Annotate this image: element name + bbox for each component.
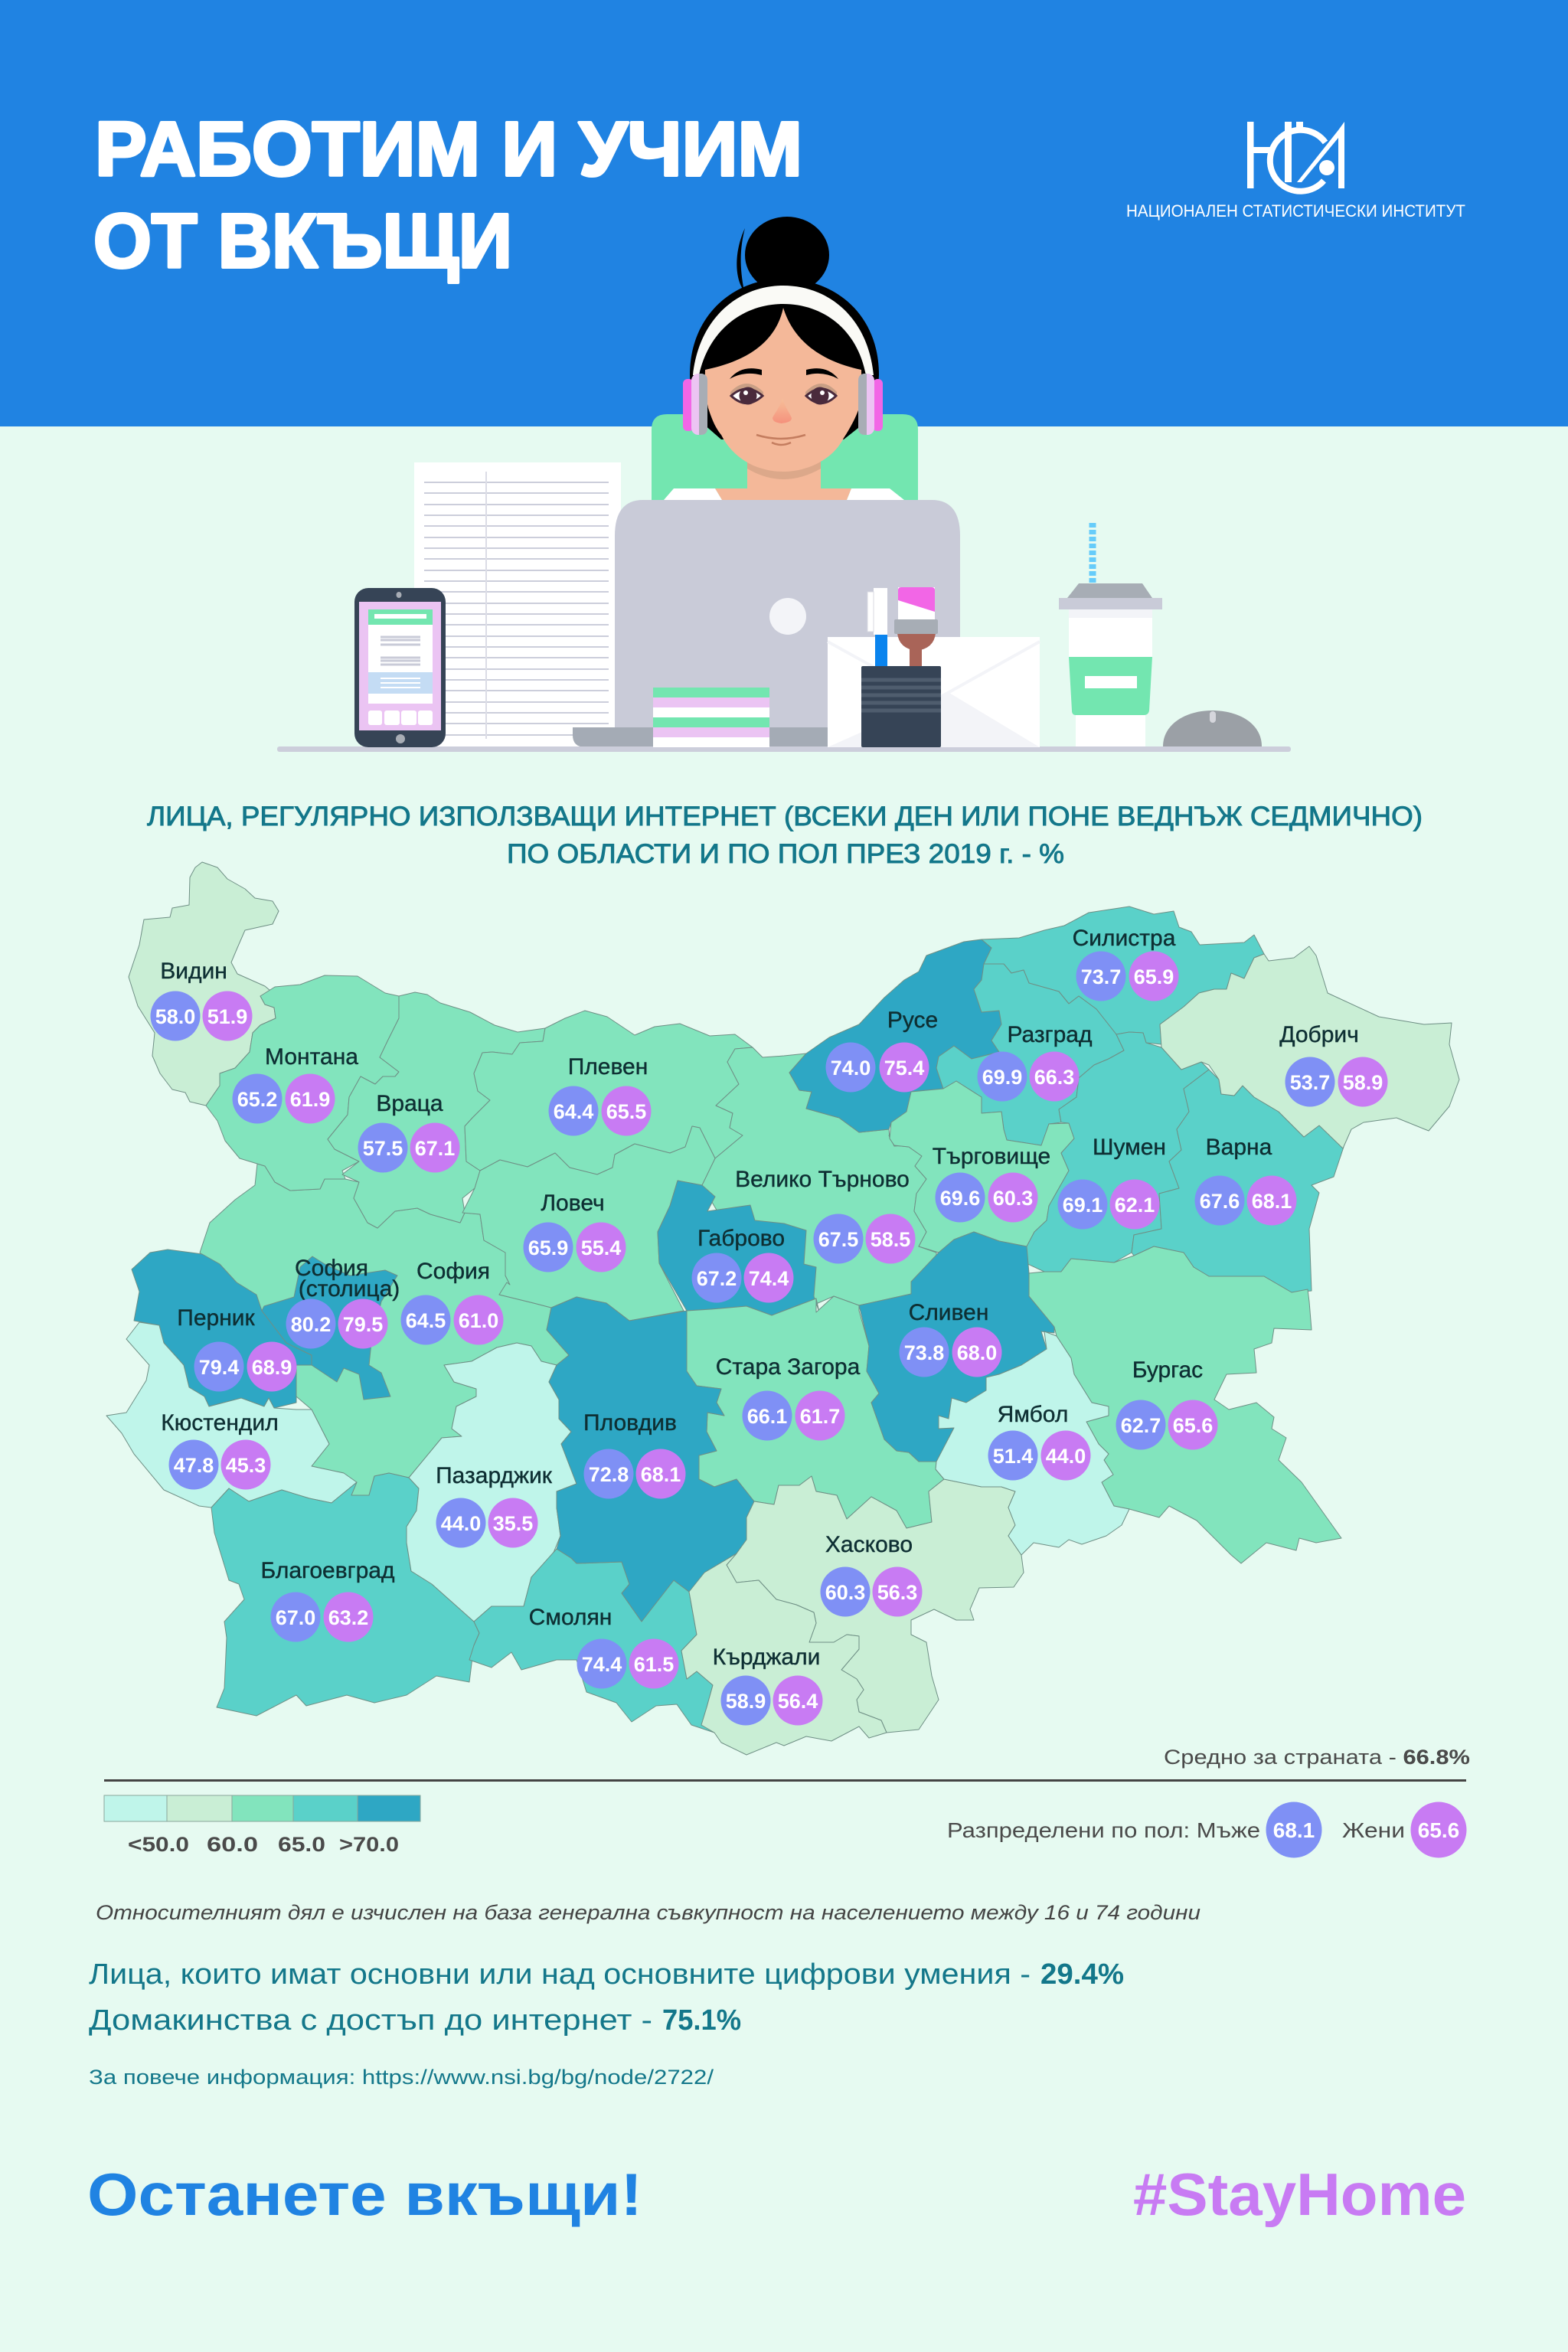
data: Силистра: 65.9 bbox=[1134, 965, 1174, 988]
data: София bbox=[401, 1259, 504, 1344]
header band bbox=[0, 0, 1568, 426]
data: Хасково bbox=[821, 1532, 922, 1617]
data: Смолян: Смолян bbox=[529, 1605, 612, 1630]
data: Габрово: 67.2 bbox=[697, 1267, 737, 1290]
data: Ловеч bbox=[524, 1191, 626, 1272]
data: Пловдив: 68.1 bbox=[641, 1463, 681, 1486]
Danube-side lake bbox=[889, 1134, 906, 1146]
map heading: ПО ОБЛАСТИ И ПО ПОЛ ПРЕЗ 2019 г. - % bbox=[507, 839, 1064, 869]
data: Кюстендил: Кюстендил bbox=[161, 1410, 279, 1436]
district: Vratsa bbox=[328, 992, 545, 1228]
internet access statistic: Домакинства с достъп до интернет - bbox=[89, 2004, 652, 2037]
data: Ямбол bbox=[988, 1402, 1090, 1481]
data: Монтана: Монтана bbox=[265, 1044, 358, 1070]
district: Haskovo bbox=[727, 1476, 1024, 1733]
district: Silistra bbox=[982, 906, 1264, 1044]
data: Ловеч: Ловеч bbox=[541, 1191, 605, 1216]
data: Шумен: 69.1 bbox=[1063, 1194, 1102, 1217]
district: Dobrich bbox=[1160, 946, 1459, 1148]
data: Пазарджик bbox=[436, 1463, 553, 1548]
data: Стара Загора: 66.1 bbox=[747, 1405, 787, 1428]
data: Враца: 57.5 bbox=[363, 1137, 403, 1160]
data: Плевен bbox=[548, 1054, 651, 1136]
data: София (столица) bbox=[286, 1256, 400, 1349]
slogan: Останете вкъщи! bbox=[87, 2161, 642, 2228]
data: Шумен bbox=[1058, 1135, 1166, 1230]
district: Burgas bbox=[1029, 1246, 1341, 1563]
data: Пловдив bbox=[583, 1410, 686, 1499]
data: Добрич bbox=[1279, 1022, 1387, 1107]
district: Plovdiv bbox=[547, 1297, 754, 1622]
district: Vidin bbox=[129, 862, 279, 1106]
data: Благоевград: 63.2 bbox=[328, 1606, 368, 1629]
data: Велико Търново: 58.5 bbox=[871, 1228, 910, 1251]
mouse bbox=[1163, 710, 1262, 746]
data: Видин bbox=[150, 959, 253, 1041]
data: Монтана: 61.9 bbox=[290, 1088, 330, 1111]
data: Враца: Враца bbox=[376, 1091, 443, 1116]
data: София: София bbox=[416, 1259, 490, 1284]
colour legend: <50.0 bbox=[128, 1833, 189, 1856]
face bbox=[705, 308, 861, 472]
data: Стара Загора: Стара Загора bbox=[716, 1354, 861, 1380]
data: Враца bbox=[358, 1091, 459, 1173]
district: Sofia region bbox=[200, 1164, 569, 1495]
data: Силистра bbox=[1073, 926, 1179, 1001]
district: Smolyan bbox=[469, 1549, 714, 1733]
data: Русе: 74.0 bbox=[831, 1057, 871, 1080]
data: София (столица): 80.2 bbox=[291, 1313, 331, 1336]
eyes bbox=[730, 368, 838, 404]
bun bbox=[737, 217, 829, 293]
internet access statistic: 75.1% bbox=[662, 2004, 741, 2037]
district: Gabrovo bbox=[658, 1181, 819, 1315]
data: Разград bbox=[977, 1022, 1092, 1101]
data: Бургас bbox=[1116, 1357, 1217, 1450]
data: Ямбол: Ямбол bbox=[998, 1402, 1068, 1427]
paper sheet bbox=[414, 462, 621, 747]
data: Разград: Разград bbox=[1008, 1022, 1092, 1047]
data: Кюстендил: 45.3 bbox=[226, 1454, 266, 1477]
data: Силистра: 73.7 bbox=[1081, 965, 1121, 988]
hashtag: #StayHome bbox=[1133, 2161, 1466, 2228]
map heading: ЛИЦА, РЕГУЛЯРНО ИЗПОЛЗВАЩИ ИНТЕРНЕТ (ВСЕКИ ДЕН ИЛИ ПОНЕ ВЕДНЪЖ СЕДМИЧНО) bbox=[147, 802, 1423, 831]
data: Плевен: Плевен bbox=[568, 1054, 648, 1080]
data: Търговище: 60.3 bbox=[993, 1187, 1033, 1210]
data: Шумен: 62.1 bbox=[1115, 1194, 1155, 1217]
gender distribution: 68.1 bbox=[1273, 1818, 1315, 1842]
envelope bbox=[828, 637, 1040, 747]
data: Смолян: 74.4 bbox=[582, 1653, 622, 1676]
notes stack bbox=[653, 688, 769, 747]
data: София: 64.5 bbox=[406, 1309, 446, 1332]
data: Бургас: Бургас bbox=[1132, 1357, 1203, 1383]
data: Благоевград: Благоевград bbox=[261, 1558, 394, 1583]
data: София: 61.0 bbox=[459, 1309, 498, 1332]
data: София (столица): (столица) bbox=[299, 1276, 400, 1302]
data: Пловдив: 72.8 bbox=[589, 1463, 629, 1486]
district: Ruse bbox=[789, 939, 1001, 1132]
district: Pleven bbox=[465, 1011, 753, 1174]
district: Sliven bbox=[859, 1232, 1054, 1462]
district: Sofia city bbox=[262, 1256, 397, 1400]
data: Кюстендил: 47.8 bbox=[174, 1454, 214, 1477]
data: Монтана bbox=[233, 1044, 358, 1124]
data: Пазарджик: Пазарджик bbox=[436, 1463, 553, 1488]
digital skills statistic: Лица, които имат основни или над основните цифрови умения - bbox=[89, 1958, 1031, 1991]
logo: national statistical institute bbox=[1126, 122, 1465, 220]
data: Враца: 67.1 bbox=[415, 1137, 455, 1160]
data: Смолян bbox=[529, 1605, 678, 1689]
colour legend: >70.0 bbox=[339, 1833, 399, 1856]
digital skills statistic: 29.4% bbox=[1040, 1958, 1124, 1991]
laptop bbox=[573, 500, 960, 747]
district: Varna bbox=[1132, 1070, 1344, 1292]
pen holder bbox=[861, 666, 941, 747]
district: Veliko Tarnovo bbox=[702, 1047, 936, 1305]
data: Пловдив: Пловдив bbox=[583, 1410, 677, 1436]
illustration: person working at desk bbox=[277, 217, 1291, 752]
data: Русе bbox=[825, 1008, 938, 1092]
phone bbox=[354, 588, 446, 747]
data: Кърджали bbox=[713, 1645, 822, 1726]
district: Razgrad bbox=[936, 964, 1124, 1145]
data: Добрич: 58.9 bbox=[1343, 1071, 1383, 1094]
colour legend: 65.0 bbox=[278, 1833, 325, 1856]
data: Кюстендил bbox=[161, 1410, 279, 1490]
data: Благоевград bbox=[261, 1558, 394, 1642]
data: Кърджали: Кърджали bbox=[713, 1645, 820, 1670]
data: Търговище: 69.6 bbox=[940, 1187, 980, 1210]
data: Ямбол: 51.4 bbox=[993, 1445, 1033, 1468]
data: Стара Загора: 61.7 bbox=[800, 1405, 840, 1428]
data: Велико Търново bbox=[735, 1167, 916, 1263]
district: Pazardzhik bbox=[407, 1343, 577, 1622]
map heading bbox=[147, 802, 1423, 869]
data: Велико Търново: 67.5 bbox=[818, 1228, 858, 1251]
data: Варна: Варна bbox=[1206, 1135, 1272, 1160]
colour legend: 60.0 bbox=[207, 1833, 258, 1856]
data: Разград: 66.3 bbox=[1034, 1066, 1074, 1089]
district: Kyustendil bbox=[106, 1322, 357, 1508]
gender distribution: Жени bbox=[1342, 1818, 1405, 1842]
country average: Средно за страната - 66.8% bbox=[1164, 1746, 1470, 1769]
title bbox=[93, 106, 802, 284]
data: Монтана: 65.2 bbox=[237, 1088, 277, 1111]
data: Шумен: Шумен bbox=[1093, 1135, 1166, 1160]
more information link: За повече информация: https://www.nsi.bg/bg/node/2722/ bbox=[89, 2066, 714, 2089]
pen bbox=[867, 588, 887, 666]
district: Shumen bbox=[1021, 1032, 1209, 1272]
data: Сливен bbox=[899, 1300, 1001, 1377]
data: Сливен: 73.8 bbox=[904, 1341, 944, 1364]
data: Сливен: Сливен bbox=[909, 1300, 988, 1325]
logo: national statistical institute: НАЦИОНАЛЕН СТАТИСТИЧЕСКИ ИНСТИТУТ bbox=[1126, 201, 1465, 220]
data: Варна: 68.1 bbox=[1252, 1190, 1292, 1213]
gender distribution: 65.6 bbox=[1418, 1818, 1459, 1842]
headband bbox=[693, 286, 874, 375]
data: Стара Загора bbox=[716, 1354, 861, 1441]
data: Видин: Видин bbox=[160, 959, 227, 984]
district: Stara Zagora bbox=[687, 1296, 944, 1528]
data: Разград: 69.9 bbox=[982, 1066, 1022, 1089]
coffee cup bbox=[1059, 523, 1162, 746]
mouth bbox=[756, 435, 805, 445]
data: Хасково: Хасково bbox=[825, 1532, 913, 1557]
district: Targovishte bbox=[890, 1081, 1074, 1253]
data: Търговище: Търговище bbox=[933, 1144, 1050, 1169]
district: Montana bbox=[206, 975, 399, 1191]
data: Търговище bbox=[933, 1144, 1050, 1222]
data: Ямбол: 44.0 bbox=[1046, 1445, 1086, 1468]
data: Перник bbox=[177, 1305, 297, 1392]
data: Кърджали: 56.4 bbox=[778, 1690, 818, 1713]
neck bbox=[715, 452, 851, 500]
data: Перник: 68.9 bbox=[252, 1356, 292, 1379]
data: Хасково: 56.3 bbox=[877, 1581, 917, 1604]
district: Kardzhali bbox=[681, 1553, 887, 1755]
map of Bulgaria by district bbox=[106, 862, 1459, 1755]
data: Добрич: Добрич bbox=[1279, 1022, 1359, 1047]
data: Велико Търново: Велико Търново bbox=[735, 1167, 910, 1192]
data: Перник: Перник bbox=[177, 1305, 256, 1331]
data: Сливен: 68.0 bbox=[957, 1341, 997, 1364]
colour legend bbox=[104, 1795, 420, 1856]
data: Габрово: 74.4 bbox=[749, 1267, 789, 1290]
data: Пазарджик: 35.5 bbox=[493, 1512, 533, 1535]
footnote: Относителният дял е изчислен на база генерална съвкупност на населението между 16 и 74 години bbox=[96, 1901, 1200, 1924]
data: София (столица): 79.5 bbox=[343, 1313, 383, 1336]
chair bbox=[652, 414, 918, 500]
data: Кърджали: 58.9 bbox=[726, 1690, 766, 1713]
district: Blagoevgrad bbox=[211, 1473, 479, 1716]
data: Видин: 51.9 bbox=[207, 1005, 247, 1028]
headphones bbox=[683, 374, 883, 435]
nose bbox=[773, 398, 792, 423]
data: Плевен: 65.5 bbox=[606, 1100, 646, 1123]
title: РАБОТИМ И УЧИМ bbox=[95, 106, 802, 192]
data: Силистра: Силистра bbox=[1073, 926, 1176, 951]
data: Хасково: 60.3 bbox=[825, 1581, 865, 1604]
data: Русе: 75.4 bbox=[884, 1057, 924, 1080]
data: Смолян: 61.5 bbox=[634, 1653, 674, 1676]
title: ОТ ВКЪЩИ bbox=[93, 198, 512, 284]
data: Варна: 67.6 bbox=[1200, 1190, 1240, 1213]
shirt bbox=[664, 488, 904, 500]
data: Пазарджик: 44.0 bbox=[441, 1512, 481, 1535]
data: Ловеч: 55.4 bbox=[581, 1236, 621, 1259]
gender distribution: Разпределени по пол: Мъже bbox=[947, 1818, 1260, 1842]
district: Pernik bbox=[132, 1250, 312, 1408]
data: Габрово: Габрово bbox=[697, 1226, 785, 1251]
data: Варна bbox=[1194, 1135, 1297, 1225]
data: Плевен: 64.4 bbox=[554, 1100, 593, 1123]
hair bbox=[690, 279, 879, 439]
data: Добрич: 53.7 bbox=[1290, 1071, 1330, 1094]
data: Ловеч: 65.9 bbox=[528, 1236, 568, 1259]
data: Габрово bbox=[692, 1226, 793, 1303]
brush bbox=[894, 587, 938, 666]
district: Yambol bbox=[936, 1331, 1129, 1555]
district: Lovech bbox=[462, 1126, 715, 1321]
data: Видин: 58.0 bbox=[155, 1005, 195, 1028]
desk bbox=[277, 746, 1291, 752]
data: Бургас: 65.6 bbox=[1173, 1414, 1213, 1437]
data: Бургас: 62.7 bbox=[1121, 1414, 1161, 1437]
gender distribution bbox=[947, 1802, 1467, 1857]
data: Перник: 79.4 bbox=[199, 1356, 239, 1379]
data: София (столица): София bbox=[295, 1256, 368, 1281]
data: Русе: Русе bbox=[887, 1008, 938, 1033]
data: Благоевград: 67.0 bbox=[276, 1606, 315, 1629]
